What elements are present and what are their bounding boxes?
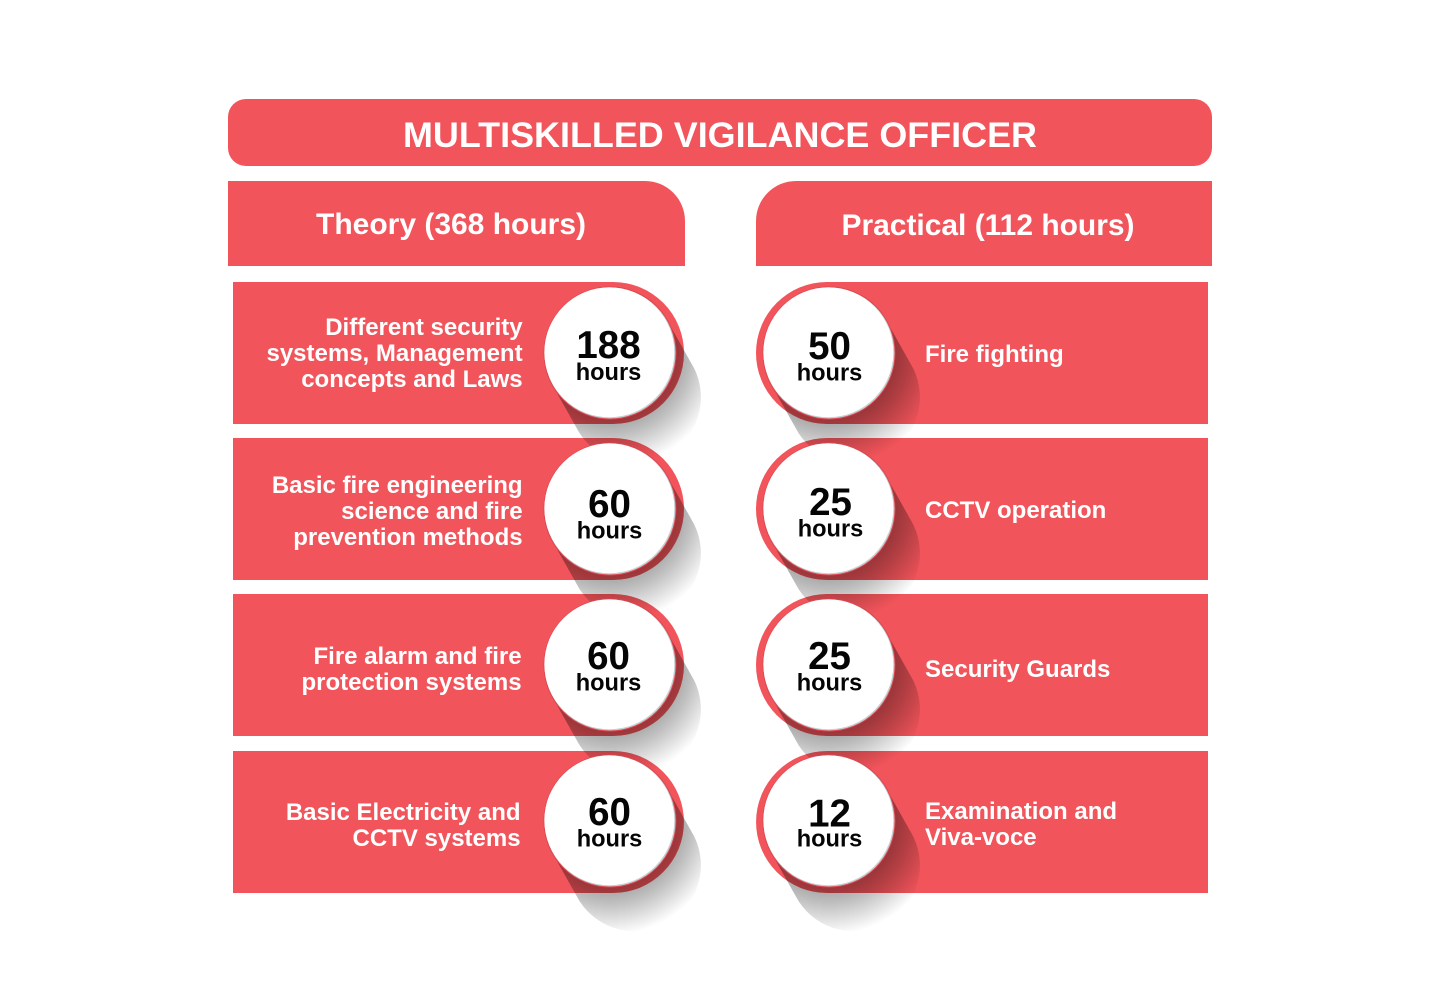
theory row backgrounds bbox=[233, 282, 684, 893]
circle: 60 hours: 60 bbox=[588, 791, 631, 834]
title banner bbox=[228, 99, 1212, 166]
circle: 50 hours bbox=[763, 287, 895, 419]
practical item 1 bbox=[763, 287, 1064, 419]
text: cctv operation: CCTV operation bbox=[925, 497, 1106, 524]
circle: 12 hours bbox=[763, 755, 895, 887]
text: security systems: concepts and Laws bbox=[301, 366, 523, 393]
circle: 25 hours: 25 bbox=[809, 481, 852, 524]
circle: 60 hours: 60 bbox=[588, 483, 631, 526]
theory item 4 bbox=[286, 755, 676, 887]
text: fire fighting: Fire fighting bbox=[925, 341, 1064, 368]
title banner: MULTISKILLED VIGILANCE OFFICER bbox=[403, 116, 1037, 155]
circle: 25 hours: hours bbox=[797, 670, 862, 696]
text: fire alarm: Fire alarm and fire bbox=[314, 643, 522, 670]
theory item 3 bbox=[302, 599, 676, 731]
practical item 3 bbox=[763, 599, 1110, 731]
circle: 60 hours bbox=[544, 755, 676, 887]
text: fire engineering: science and fire bbox=[341, 498, 523, 525]
long shadows behind circles bbox=[553, 321, 920, 931]
circle: 12 hours: hours bbox=[797, 826, 862, 852]
circle: 60 hours bbox=[544, 599, 676, 731]
practical item 4 bbox=[763, 755, 1117, 887]
text: examination: Viva-voce bbox=[925, 824, 1037, 851]
theory item 2 bbox=[272, 443, 676, 575]
practical row backgrounds bbox=[756, 282, 1208, 893]
circle: 12 hours: 12 bbox=[808, 792, 851, 836]
practical item 2 bbox=[763, 443, 1106, 575]
text: examination: Examination and bbox=[925, 798, 1117, 825]
circle: 60 hours bbox=[544, 443, 676, 575]
circle: 25 hours bbox=[763, 599, 895, 731]
heading: practical: Practical (112 hours) bbox=[842, 209, 1134, 242]
circle: 60 hours: hours bbox=[576, 670, 641, 696]
circle: 188 hours: hours bbox=[576, 360, 641, 386]
text: fire engineering: Basic fire engineering bbox=[272, 472, 523, 499]
circle: 25 hours: hours bbox=[798, 516, 863, 542]
circle: 60 hours: hours bbox=[577, 826, 642, 852]
circle: 25 hours: 25 bbox=[808, 635, 851, 678]
text: electricity and cctv: CCTV systems bbox=[353, 825, 521, 852]
text: fire alarm: protection systems bbox=[302, 669, 522, 696]
text: fire engineering: prevention methods bbox=[293, 524, 523, 551]
circle: 25 hours bbox=[763, 443, 895, 575]
circle: 60 hours: 60 bbox=[587, 635, 630, 678]
text: electricity and cctv: Basic Electricity and bbox=[286, 799, 521, 826]
heading: practical bbox=[756, 181, 1212, 266]
text: security guards: Security Guards bbox=[925, 656, 1110, 683]
circle: 60 hours: hours bbox=[577, 518, 642, 544]
text: security systems: Different security bbox=[325, 314, 523, 341]
circle: 50 hours: 50 bbox=[808, 325, 851, 368]
heading: theory bbox=[228, 181, 685, 266]
circle: 50 hours: hours bbox=[797, 360, 862, 386]
theory item 1 bbox=[266, 287, 676, 419]
circle: 188 hours bbox=[544, 287, 676, 419]
circle: 188 hours: 188 bbox=[576, 324, 641, 367]
text: security systems: systems, Management bbox=[266, 340, 523, 367]
heading: theory: Theory (368 hours) bbox=[316, 208, 586, 241]
